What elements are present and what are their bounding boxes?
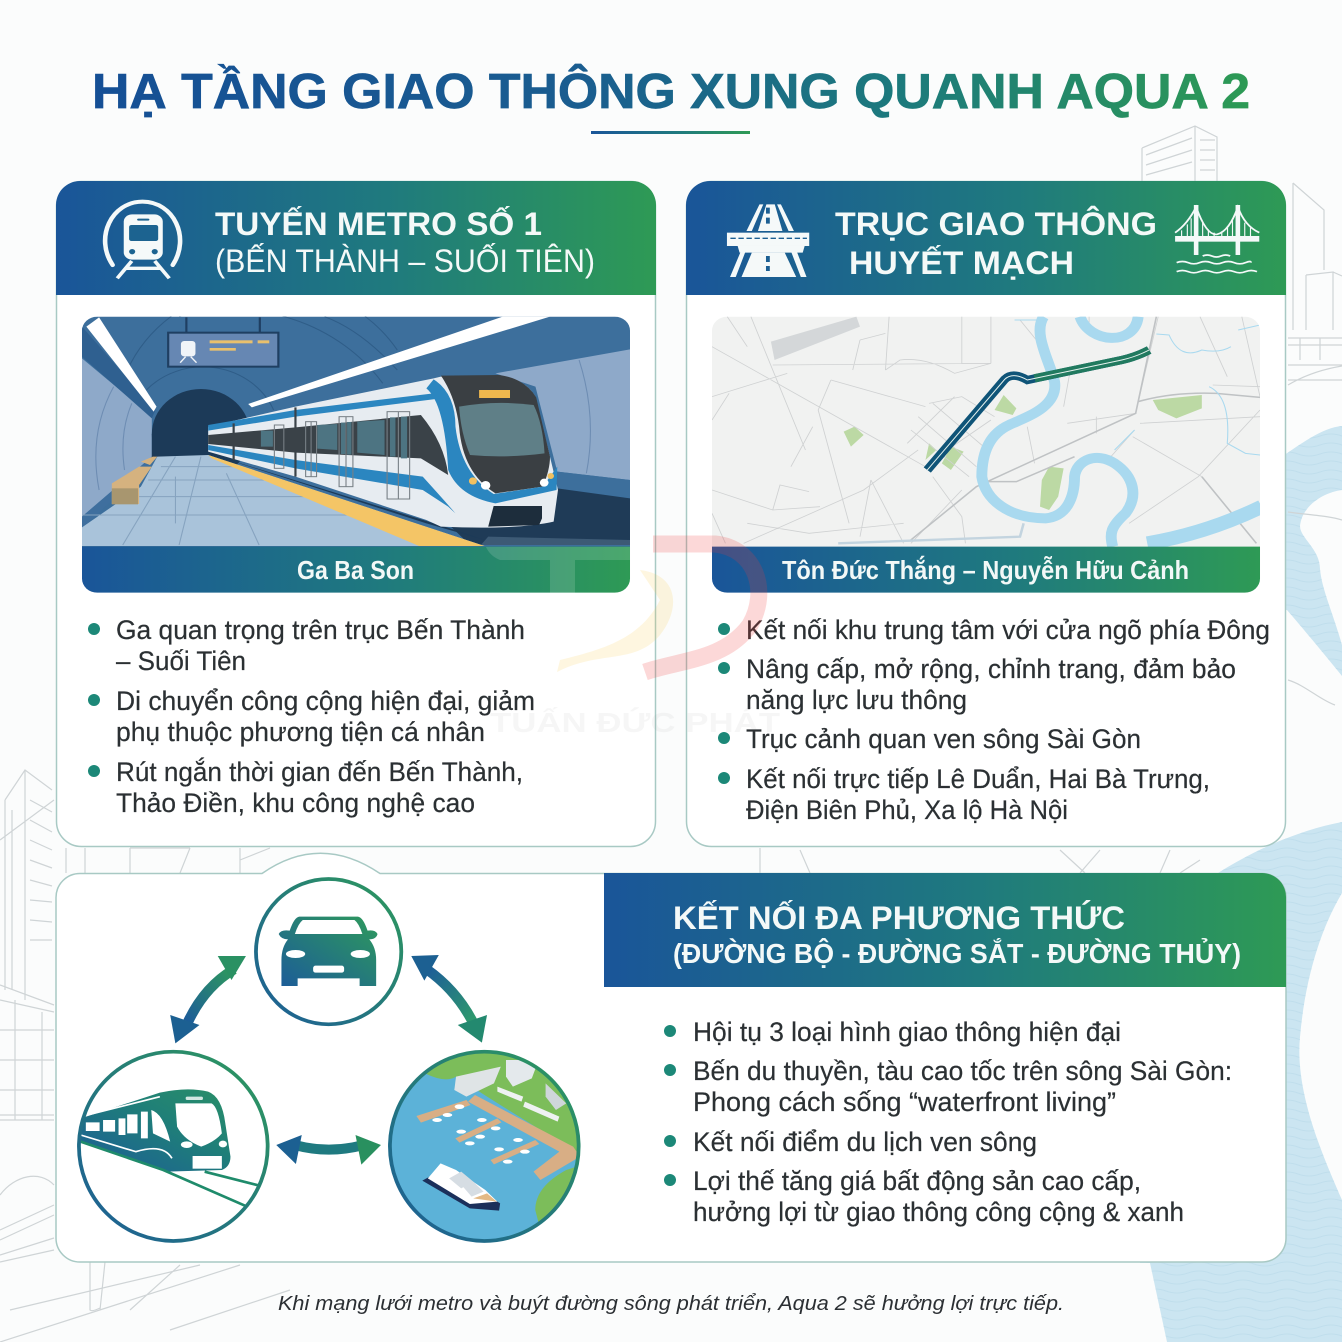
caption: road name: Tôn Đức Thắng – Nguyễn Hữu Cảnh <box>782 555 1189 585</box>
bullet list: multimodal benefits <box>664 1017 1232 1227</box>
bullet list: road benefits: Nâng cấp, mở rộng, chỉnh trang, đảm bảo <box>746 654 1236 684</box>
arrow: train to car <box>170 956 246 1043</box>
city sketch: top right <box>1142 126 1342 705</box>
river: upper right <box>1262 426 1342 676</box>
bullet list: road benefits: Điện Biên Phủ, Xa lộ Hà Nội <box>746 795 1068 825</box>
panel: multimodal connection <box>56 853 1286 1262</box>
heading: huyết mạch: HUYẾT MẠCH <box>849 245 1074 281</box>
road highlight <box>927 350 1149 470</box>
bullet list: multimodal benefits: hưởng lợi từ giao thông công cộng & xanh <box>693 1197 1184 1227</box>
panel body <box>686 182 1286 846</box>
heading: Trục giao thông: TRỤC GIAO THÔNG <box>835 206 1157 242</box>
icon: highway overpass <box>727 204 809 277</box>
city sketch: bottom roads <box>0 848 1200 1342</box>
bullet list: road benefits: Trục cảnh quan ven sông Sài Gòn <box>746 724 1141 754</box>
bullet list: road benefits: Kết nối trực tiếp Lê Duẩn, Hai Bà Trưng, <box>746 764 1210 794</box>
caption band <box>712 547 1260 593</box>
panel header band <box>604 873 1286 987</box>
footer note: Khi mạng lưới metro và buýt đường sông phát triển, Aqua 2 sẽ hưởng lợi trực tiếp. <box>278 1292 1064 1315</box>
panel body <box>56 853 1286 1262</box>
parks <box>844 395 1202 510</box>
arrow: train to marina <box>276 1135 381 1165</box>
bullet list: metro benefits: Di chuyển công cộng hiện đại, giảm <box>116 686 535 716</box>
platform sign <box>168 317 278 367</box>
city sketch: left building <box>0 770 54 1262</box>
bullet list: multimodal benefits: Bến du thuyền, tàu cao tốc trên sông Sài Gòn: <box>693 1056 1232 1086</box>
bullet list: road benefits: Kết nối khu trung tâm với cửa ngõ phía Đông <box>746 615 1270 645</box>
circle: metro train <box>79 1052 270 1241</box>
circle: car <box>256 879 401 1024</box>
bullet list: metro benefits: – Suối Tiên <box>116 646 246 676</box>
caption: Ga Ba Son: Ga Ba Son <box>297 555 414 585</box>
watermark logo: TUẤN ĐỨC PHÁT <box>490 707 780 738</box>
panel header band <box>686 181 1286 295</box>
bullet list: metro benefits: phụ thuộc phương tiện cá nhân <box>116 717 485 747</box>
panel: arterial road <box>686 181 1286 846</box>
panel header band <box>56 181 656 295</box>
bullet list: road benefits <box>718 615 1270 825</box>
map: Ton Duc Thang to Nguyen Huu Canh <box>712 317 1262 593</box>
title underline <box>591 131 750 134</box>
subheading: route: (BẾN THÀNH – SUỐI TIÊN) <box>215 243 595 279</box>
river: upper right texture <box>1262 426 1342 676</box>
river: lower right <box>1140 822 1342 1342</box>
saigon river <box>982 317 1133 547</box>
subheading: modes: (ĐƯỜNG BỘ - ĐƯỜNG SẮT - ĐƯỜNG THỦY) <box>673 937 1241 969</box>
panel body <box>56 182 656 846</box>
icon: metro train in tunnel <box>105 202 180 278</box>
river: lower right texture <box>1140 822 1342 1342</box>
illustration: Ba Son station <box>82 316 630 593</box>
bullet list: metro benefits: Rút ngắn thời gian đến Bến Thành, <box>116 756 523 787</box>
caption band <box>82 547 630 593</box>
bullet list: multimodal benefits: Phong cách sống “waterfront living” <box>693 1087 1116 1117</box>
bullet list: metro benefits <box>88 615 535 818</box>
bullet list: multimodal benefits: Lợi thế tăng giá bất động sản cao cấp, <box>693 1166 1141 1196</box>
watermark logo <box>486 544 780 738</box>
circle: marina <box>390 1047 587 1241</box>
heading: multimodal: KẾT NỐI ĐA PHƯƠNG THỨC <box>673 900 1125 936</box>
panel: metro line 1 <box>56 181 656 846</box>
arrow: car to marina <box>411 955 487 1043</box>
heading: Tuyến Metro số 1: TUYẾN METRO SỐ 1 <box>215 206 542 242</box>
title: HẠ TẦNG GIAO THÔNG XUNG QUANH AQUA 2 <box>92 64 1250 119</box>
icon: suspension bridge <box>1175 205 1259 273</box>
bullet list: multimodal benefits: Kết nối điểm du lịch ven sông <box>693 1127 1037 1157</box>
bullet list: metro benefits: Thảo Điền, khu công nghệ cao <box>116 788 475 818</box>
bullet list: multimodal benefits: Hội tụ 3 loại hình giao thông hiện đại <box>693 1017 1121 1047</box>
bullet list: metro benefits: Ga quan trọng trên trục Bến Thành <box>116 615 525 645</box>
bullet list: road benefits: năng lực lưu thông <box>746 685 967 715</box>
diagram: transport modes cycle <box>79 879 587 1241</box>
